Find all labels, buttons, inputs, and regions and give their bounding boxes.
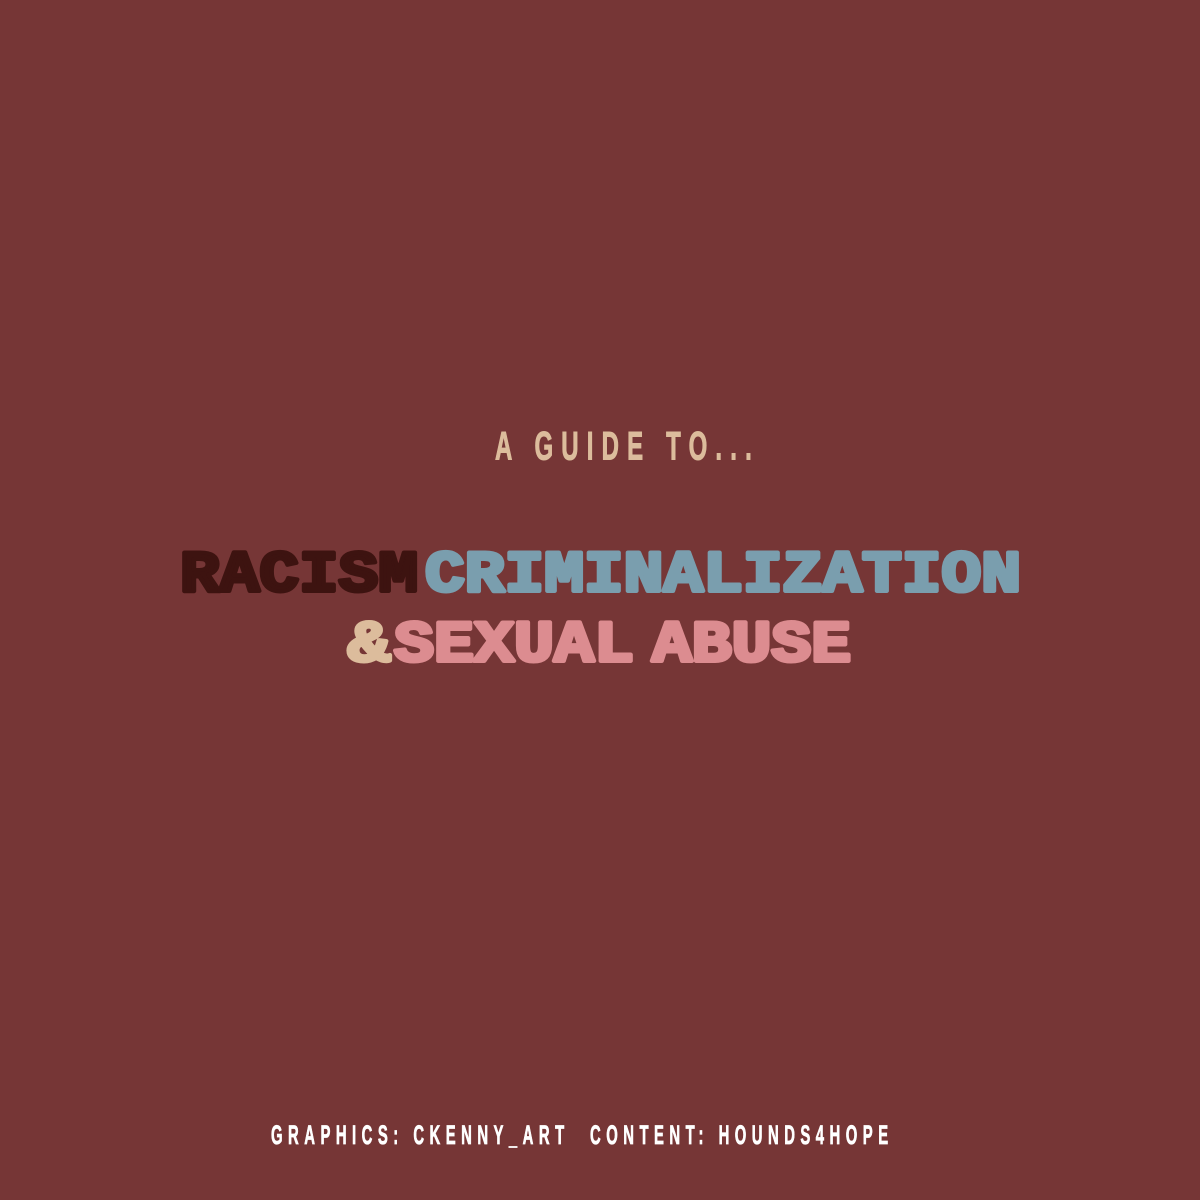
title word: abuse: ABUSE: [652, 614, 851, 679]
credit: graphics: GRAPHICS: CKENNY_ART: [271, 1119, 565, 1150]
title ampersand: &: [348, 614, 390, 679]
title word: sexual: SEXUAL: [394, 614, 634, 679]
title word: racism: RACISM: [180, 544, 418, 609]
subtitle: a guide to: A GUIDE TO...: [495, 423, 752, 468]
title word: criminalization: CRIMINALIZATION: [425, 544, 1021, 609]
credits: [271, 1119, 888, 1150]
title: [180, 544, 1021, 679]
credit: content: CONTENT: HOUNDS4HOPE: [590, 1119, 888, 1150]
